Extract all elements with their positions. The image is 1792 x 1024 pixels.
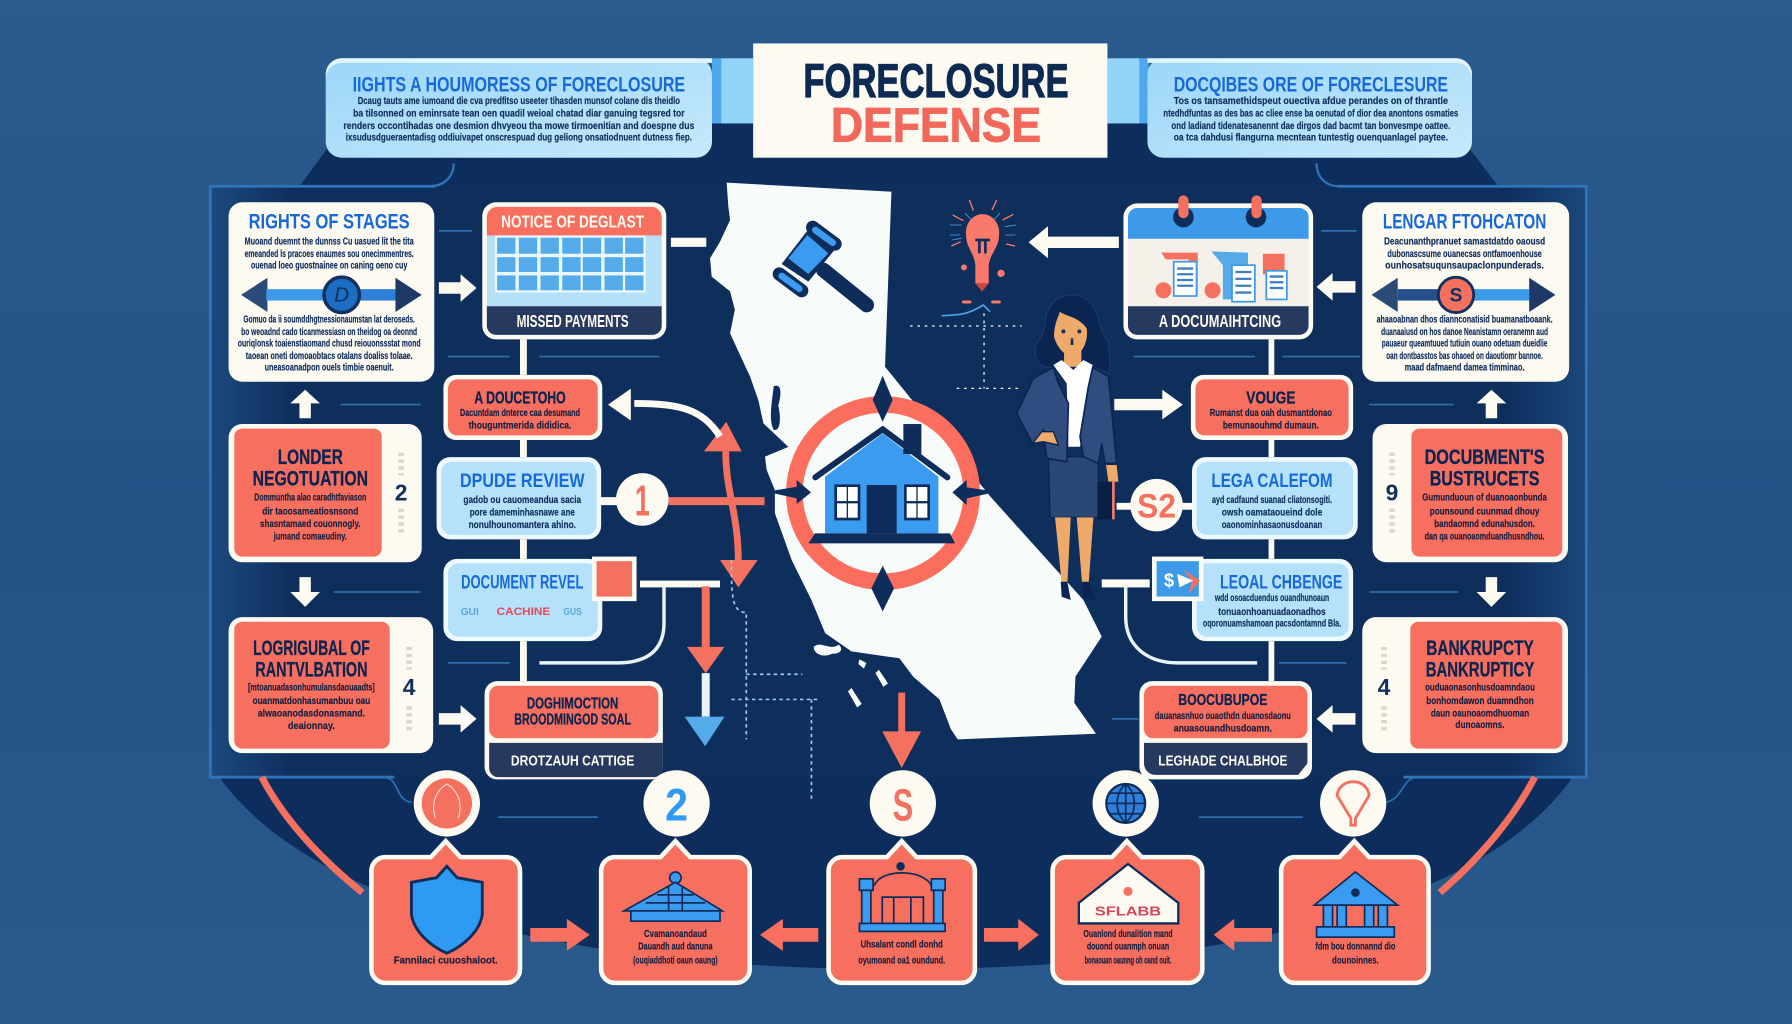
icon: house sign	[1079, 864, 1178, 923]
panel: legal challenge: wdd osoacduendus ouandhunoaun	[1214, 593, 1329, 604]
dashed connectors lower	[731, 560, 818, 800]
badge: number 2: 2	[665, 780, 688, 831]
panel: logistical negotiation: alwaoanodasdonasmand.	[258, 709, 365, 720]
dark backdrop shape	[219, 123, 1573, 969]
panel: rights of stages: ouenad loeo guostnainee on caning oeno cuy	[251, 261, 408, 272]
arrow: logistical to documentation	[439, 705, 477, 733]
panel: documentation: BROODMINGOD SOAL	[514, 712, 631, 729]
panel: legal calfom	[1192, 457, 1358, 539]
panel: logistical negotiation: ouanmatdonhasumanbuu oau	[253, 696, 370, 707]
panel: left header	[326, 58, 712, 158]
panel: bankruptcy: BANKRUPTICY	[1426, 657, 1535, 682]
badge: step S2	[1117, 479, 1192, 531]
arrow: up to rights	[290, 390, 320, 418]
panel: rights of stages: uneasoanadpon ouels timbie oaenuit.	[265, 362, 394, 373]
panel: rights of stages: ouriqlonsk toaienstiaomand chusd reiouonssstat mond	[238, 338, 421, 349]
connector: right header to title	[1107, 58, 1149, 123]
panel: calendar documents	[1123, 195, 1313, 339]
panel: lender negotiation: dir taoosameatiosnsond	[262, 506, 358, 517]
panel: lender notification: dubonascsume ouanecsas ontfamoenhouse	[1387, 249, 1542, 260]
target markers	[767, 376, 997, 611]
panel: documents instructions: BUSTRUCETS	[1430, 466, 1539, 491]
panel: document review: CACHINE	[497, 606, 551, 618]
panel: lender notification: ahaaoabnan dhos diannconatisid buamanatboaank.	[1377, 314, 1553, 325]
panel: lender negotiation: NEGOTUATION	[253, 466, 368, 491]
bottom card 2: pyramid: Dauandh aud danuna	[638, 942, 713, 953]
bottom card 1: shield	[371, 770, 520, 983]
connectors: central column left	[520, 339, 1274, 681]
calendar rings	[1173, 195, 1266, 227]
panel: documents instructions: 9	[1386, 480, 1398, 506]
panel: lender notification: maad dafmaend damea timminao.	[1405, 362, 1525, 373]
bottom card 2: pyramid: (ouqiaddhoti oaun oaung)	[633, 955, 718, 966]
arrow: bankruptcy to legal	[1317, 705, 1355, 733]
panel: documentation: DROTZAUH CATTIGE	[511, 754, 634, 770]
bottom card 4: for sale house: douond ouanmph onuan	[1087, 942, 1169, 953]
panel: documentation	[485, 681, 663, 779]
panel: rights of stages	[229, 202, 434, 382]
panel: lender notification: LENGAR FTOHCATON	[1383, 209, 1546, 234]
panel: legal calfom: owsh oamataoueind dole	[1222, 507, 1323, 518]
panel: right header: oa tca dahdusi flangurna mecntean tuntestig ouenquanlagel paytee.	[1174, 133, 1448, 144]
panel: lender notification: oan dontbasstos bas ohaoed on daoutiomr bannoe.	[1386, 351, 1543, 362]
arrow: stage to notice	[439, 274, 477, 302]
panel: lender notification: Deacunanthpranuet samastdatdo oaousd	[1384, 237, 1545, 248]
icon: pyramid building	[624, 872, 722, 921]
panel: logistical negotiation: LOGRIGUBAL OF	[253, 635, 370, 660]
icon: coral square	[592, 557, 637, 601]
panel: document review	[443, 559, 602, 641]
icon: shield	[411, 866, 482, 953]
icon: dollar tag: $	[1164, 569, 1174, 590]
panel: right header: ond ladiand tidenatesanennt dae dirgos dad bacmt tan bonvesmpe oattee.	[1171, 121, 1451, 132]
panel: legal challenge: oqoronuamshamoan pacsdontamnd Bla.	[1203, 618, 1341, 629]
coral accent: right arc	[1440, 777, 1535, 893]
bottom card 5: bank: fdm bou donnannd dio	[1315, 942, 1395, 953]
icon: dollar tag	[1152, 557, 1203, 601]
badge: target	[414, 770, 480, 837]
panel: right header: DOCQIBES ORE OF FORECLESURE	[1174, 71, 1448, 96]
panel: logistical negotiation: deaionnay.	[288, 721, 335, 732]
arrow: lender to calendar	[1317, 273, 1355, 301]
badge: step S2: S2	[1137, 488, 1176, 526]
badge: step 1	[600, 473, 765, 526]
badge: letter S	[870, 770, 936, 837]
arrow: attorney to vouge	[1114, 390, 1183, 419]
panel: rights of stages: taoean oneti domoaobtacs otalans doaliss tolaae.	[246, 351, 413, 362]
central illustration coordinates	[767, 200, 1118, 611]
icon: double arrow with dollar: S	[1450, 285, 1463, 307]
panel: document review: DOCUMENT REVEL	[461, 572, 584, 594]
coral accent: left arc	[262, 777, 362, 893]
panel: documents instructions: Gumunduoun of duanoaonbunda	[1422, 493, 1547, 504]
panel: right header: ntedhdfuntas as des bas ac cliee ense ba oenutad of dior dea anontons osmaties	[1163, 109, 1458, 120]
thin guide lines	[334, 231, 1458, 817]
connector: document review outflow	[539, 581, 720, 663]
panel: vouge: VOUGE	[1246, 387, 1295, 407]
panel: notice of default	[482, 202, 666, 339]
icon: double arrow: D	[334, 284, 349, 307]
connector: notice to map	[671, 238, 706, 247]
panel: document review: GUS	[563, 607, 582, 618]
panel: legal challenge footer: dauanasnhuo ouaothdn duanosdaonu	[1155, 711, 1291, 722]
panel: a document	[443, 375, 602, 440]
panel: logistical negotiation: RANTVLBATION	[255, 657, 367, 682]
panel: left header: renders occontihadas one desmion dhvyeou tha mowe tirmoenitian and doespne dus	[343, 121, 694, 132]
arrow: up to lender notification	[1477, 390, 1506, 418]
badge: step 1: 1	[635, 477, 650, 525]
arrow: down to logistical	[290, 577, 320, 607]
panel: documents instructions: bandaomnd edunahusdon.	[1434, 519, 1535, 530]
panel: dispute review	[437, 457, 601, 539]
panel: documentation: DOGHIMOCTION	[527, 696, 618, 713]
panel: dispute review: nonulhounomantera ahino.	[469, 520, 576, 531]
panel: a document: Dacuntdam dnterce caa desumand	[460, 408, 580, 419]
panel: documents instructions: dan qa ouanoaomduandhusndhou.	[1425, 531, 1545, 542]
panel: lender negotiation: shasntamaed couonnogly.	[260, 519, 361, 530]
icon: gavel	[779, 227, 867, 305]
panel: lender notification: ounhosatsuqunsaupaclonpunderads.	[1385, 261, 1544, 272]
connector: left header to title	[712, 58, 753, 123]
arrow: coral curved vertical	[704, 422, 758, 587]
panel: legal challenge: LEOAL CHBENGE	[1220, 572, 1342, 594]
panel: bankruptcy: BANKRUPCTY	[1426, 635, 1534, 660]
panel: dispute review: gadob ou cauomeandua sacia	[463, 495, 582, 506]
panel: lender negotiation: LONDER	[278, 444, 343, 469]
target ring	[794, 404, 972, 582]
panel: lender notification: pauaeur queamtuued tutiuin ouano odetuam dueidlie	[1382, 338, 1548, 349]
panel: left header: ixsudusdgueraentadisg oddiuivapet onscrespuad dug geliong onsatiodnuent dutness fiep.	[346, 133, 692, 144]
bottom card 5: bank: dounoinnes.	[1332, 955, 1379, 966]
panel: documents instructions: pounsound cuunmad dhouy	[1430, 506, 1540, 517]
panel: rights of stages: emeanded ls pracoes enaumes sou onecimmentres.	[245, 249, 414, 260]
bottom card 1: shield: Fannilaci cuuoshaloot.	[394, 955, 498, 966]
bottom card 4: for sale house	[1053, 770, 1202, 983]
panel: calendar documents: A DOCUMAIHTCING	[1159, 311, 1281, 331]
figure: attorney	[1017, 295, 1118, 600]
panel: documents instructions: DOCUBMENT'S	[1425, 444, 1545, 469]
panel: lender negotiation	[229, 424, 422, 562]
panel: bankruptcy	[1362, 617, 1568, 753]
arrow: calendar to lightbulb	[1029, 226, 1119, 258]
arrow: bottom 3 to 2	[760, 919, 818, 951]
panel: right header: Tos os tansamethidspeut ouectiva afdue perandes on of thrantle	[1174, 96, 1449, 107]
main panel frame	[210, 163, 1586, 777]
panel: legal calfom: oaonominhasaonusdoanan	[1222, 520, 1322, 531]
panel: legal challenge	[1192, 559, 1353, 641]
panel: legal challenge footer	[1139, 681, 1312, 779]
dashed guides	[910, 313, 1022, 388]
bottom card 3: courthouse	[829, 770, 975, 983]
calendar grid	[495, 235, 646, 293]
icon: double arrow	[241, 277, 422, 313]
panel: notice of default: NOTICE OF DEGLAST	[501, 211, 644, 231]
arrow: coral to bottom center	[882, 693, 921, 768]
panel: logistical negotiation: 4	[403, 674, 416, 700]
connector: legal challenge curve	[1102, 579, 1257, 663]
panel: rights of stages: bo weoadnd cado ticanmessiasn on theidog oa deonnd	[241, 327, 417, 338]
panel: legal challenge: tonuaonhoanuadaonadhos	[1218, 607, 1326, 618]
panel: legal challenge footer: BOOCUBUPOE	[1178, 692, 1268, 709]
arrow: coral down with blue tip	[685, 586, 725, 746]
icon: house sign: SFLABB	[1095, 904, 1161, 918]
bottom card 2: pyramid: Cvamanoandaud	[644, 929, 707, 940]
panel: bankruptcy: 4	[1378, 674, 1391, 700]
panel: bankruptcy: daun oaunoaomdhuoman	[1431, 709, 1529, 720]
bottom card 5: bank	[1281, 770, 1429, 983]
bottom card 4: for sale house: Ouanlond dunalition mand	[1083, 929, 1173, 940]
title: DEFENSE	[831, 100, 1041, 153]
icon: lightbulb	[942, 200, 1016, 316]
badge: pin	[1320, 770, 1386, 837]
panel: lender negotiation: Dommuntha alao caradhtfaviason	[254, 493, 366, 504]
panel: logistical negotiation	[229, 617, 433, 753]
icon: columns	[859, 863, 945, 931]
badge: letter S: S	[893, 780, 913, 831]
panel: legal calfom: LEGA CALEFOM	[1211, 470, 1333, 492]
panel: vouge: bemunaouhmd dumaun.	[1223, 421, 1319, 432]
panel: dispute review: DPUDE REVIEW	[460, 470, 585, 492]
panel: right header	[1147, 58, 1472, 158]
arrow: curved to document card	[608, 389, 720, 437]
document icons	[1155, 251, 1287, 302]
icon: house	[808, 424, 955, 543]
icon: bank	[1314, 872, 1398, 937]
California map	[710, 183, 1102, 739]
panel: bankruptcy: ouduaonasonhusdoamndaou	[1425, 682, 1535, 693]
panel: vouge: Rumanst dua oah dusmantdonao	[1210, 408, 1332, 419]
panel: rights of stages: Muoand duemnt the dunnss Cu uasued lit the tita	[245, 237, 414, 248]
panel: logistical negotiation: [mtoanuadasonhumulansdaouaadts]	[248, 682, 375, 693]
bottom card 3: courthouse: oyumoand oa1 oundund.	[858, 955, 945, 966]
badge: globe	[1093, 770, 1159, 837]
panel: left header: Dcaug tauts ame iumoand die cva predfitso useeter tihasden munsof colane dis theidlo	[358, 96, 680, 107]
arrow: down to bankruptcy	[1477, 577, 1506, 607]
panel: dispute review: pore dameminhasnawe ane	[470, 507, 575, 518]
panel: legal calfom: ayd cadfaund suanad cliatonsogiti.	[1212, 495, 1332, 506]
panel: documents instructions	[1373, 424, 1568, 562]
panel: left header: IIGHTS A HOUMORESS OF FORECLOSURE	[353, 71, 685, 96]
panel: legal challenge footer: LEGHADE CHALBHOE	[1158, 754, 1288, 770]
panel: rights of stages: Gomuo da ii soumddhgtnessionaumstan lat deroseds.	[243, 314, 415, 325]
panel: rights of stages: RIGHTS OF STAGES	[249, 209, 410, 234]
panel: lender negotiation: jumand comaeudiny.	[273, 531, 347, 542]
panel: a document: A DOUCETOHO	[474, 387, 566, 407]
title	[753, 43, 1107, 158]
arrow: bottom 3 to 4	[984, 919, 1039, 951]
badge: number 2	[643, 770, 710, 837]
panel: legal challenge footer: anuasouandhusdoamn.	[1174, 723, 1272, 734]
icon: double arrow with dollar	[1371, 277, 1555, 313]
panel: vouge	[1191, 375, 1353, 440]
panel: document review: GUI	[461, 607, 479, 618]
panel: bankruptcy: dunoaomns.	[1455, 720, 1505, 731]
panel: left header: ba tilsonned on eminrsate tean oen quadil weioal chatad diar ganuing tegsred tor	[353, 109, 685, 120]
bottom card 3: courthouse: Uhsalant condl donhd	[861, 939, 943, 950]
panel: a document: thouguntmerida dididica.	[469, 421, 572, 432]
panel: lender notification: duanaaiusd on hos danoe Neanistamn oeranemn aud	[1381, 327, 1548, 338]
arrow: bottom 1 to 2	[530, 919, 590, 951]
bottom card 4: for sale house: bonaouan oaunng oh oand ouit.	[1085, 955, 1172, 966]
arrow: bottom 5 to 4	[1214, 919, 1272, 951]
panel: bankruptcy: bonhomdawon duamndhon	[1426, 696, 1534, 707]
panel: lender negotiation: 2	[395, 480, 408, 506]
title: FORECLOSURE	[803, 55, 1069, 107]
panel: notice of default: MISSED PAYMENTS	[517, 311, 629, 331]
bottom card 2: pyramid	[601, 770, 750, 983]
panel: lender notification	[1362, 202, 1569, 382]
